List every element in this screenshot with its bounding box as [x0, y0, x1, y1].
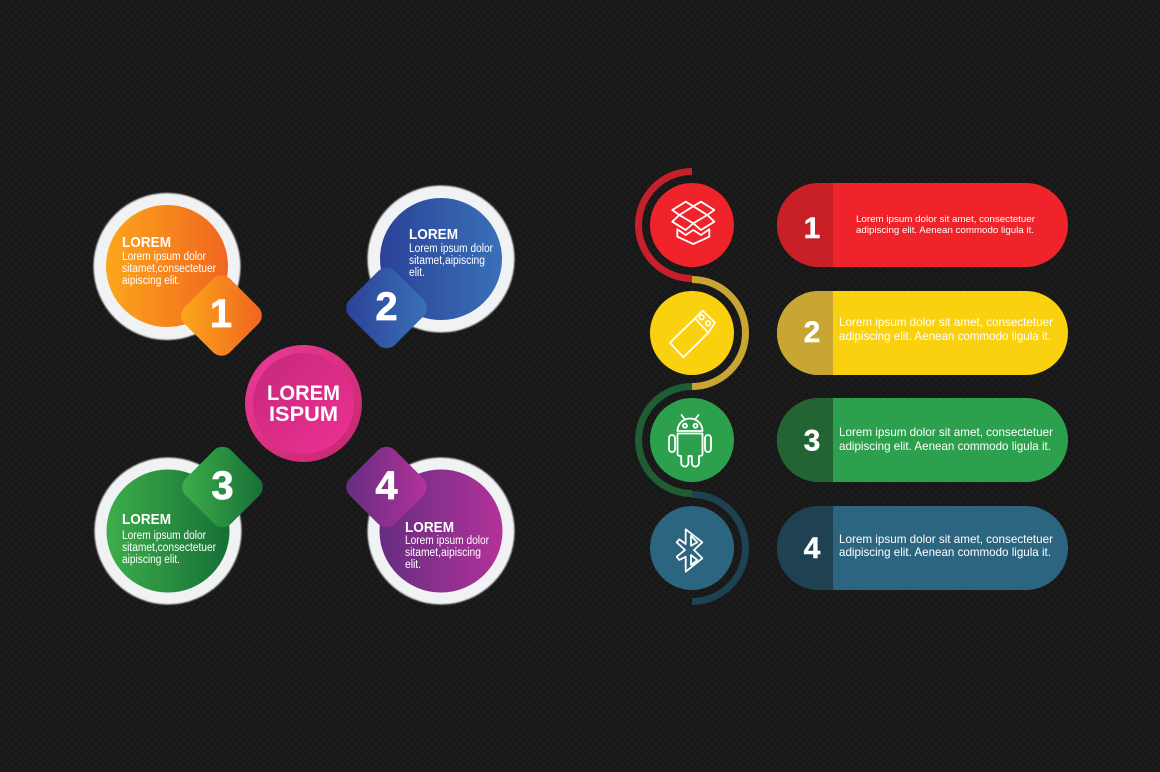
node 1: orange circle: Lorem ipsum dolor — [122, 251, 206, 263]
node 3: green circle: LOREM — [122, 511, 171, 528]
center circle: ISPUM — [269, 403, 338, 426]
pill 4: adipiscing elit. Aenean commodo ligula it. — [839, 545, 1051, 559]
circle icon: android — [650, 398, 734, 482]
pill 4: 4 — [804, 532, 821, 565]
node 3: green circle: Lorem ipsum dolor — [122, 530, 206, 542]
node 1: orange circle: sitamet,consectetuer — [122, 263, 216, 275]
arc yellow — [692, 280, 746, 386]
node 4: purple circle — [368, 458, 514, 604]
pill 2: adipiscing elit. Aenean commodo ligula it. — [839, 329, 1051, 343]
pill 3: 3 — [804, 424, 820, 458]
badge 2 — [346, 268, 427, 348]
node 4: purple circle: elit. — [405, 559, 421, 571]
pill 2: 2 — [804, 316, 820, 349]
pill 2 — [777, 291, 1068, 375]
pill 3: Lorem ipsum dolor sit amet, consectetuer — [839, 425, 1053, 439]
arc red — [638, 172, 692, 278]
pill 1: adipiscing elit. Aenean commodo ligula it. — [856, 225, 1034, 236]
badge 1: 1 — [210, 292, 232, 336]
node 1: orange circle: LOREM — [122, 234, 171, 251]
circle icon: usb — [650, 291, 734, 375]
badge 2: 2 — [375, 285, 398, 329]
pill 4 — [777, 506, 1068, 590]
center circle: LOREM — [267, 382, 340, 405]
center circle — [245, 345, 362, 462]
badge 1 — [181, 275, 262, 356]
pill 4: Lorem ipsum dolor sit amet, consectetuer — [839, 532, 1053, 546]
node 4: purple circle: Lorem ipsum dolor — [405, 535, 489, 547]
node 4: purple circle: LOREM — [405, 519, 454, 536]
node 2: blue circle: elit. — [409, 267, 425, 279]
badge 3 — [182, 447, 263, 527]
pill 3 — [777, 398, 1068, 482]
pill 2: Lorem ipsum dolor sit amet, consectetuer — [839, 315, 1053, 329]
node 2: blue circle: sitamet,aipiscing — [409, 255, 485, 267]
panel: circular diagram — [94, 186, 514, 604]
pill 1 — [777, 183, 1068, 267]
badge 3: 3 — [211, 464, 234, 508]
circle icon: box — [650, 183, 734, 267]
node 4: purple circle: sitamet,aipiscing — [405, 547, 481, 559]
badge 4: 4 — [375, 464, 398, 508]
panel: icon timeline — [638, 172, 746, 602]
node 1: orange circle: aipiscing elit. — [122, 275, 180, 287]
pill 1: 1 — [804, 212, 820, 245]
pill 1: Lorem ipsum dolor sit amet, consectetuer — [856, 214, 1036, 225]
node 2: blue circle — [368, 186, 514, 332]
node 3: green circle: aipiscing elit. — [122, 554, 180, 566]
node 2: blue circle: LOREM — [409, 226, 458, 243]
arc blue — [692, 494, 746, 602]
pill 3: adipiscing elit. Aenean commodo ligula it. — [839, 439, 1051, 453]
node 1: orange circle — [94, 193, 240, 340]
node 3: green circle — [94, 458, 242, 604]
arc green — [639, 386, 692, 494]
panel: pill list — [777, 183, 1068, 590]
circle icon: bluetooth — [650, 506, 734, 590]
badge 4 — [346, 447, 427, 527]
node 3: green circle: sitamet,consectetuer — [122, 542, 216, 554]
node 2: blue circle: Lorem ipsum dolor — [409, 243, 493, 255]
